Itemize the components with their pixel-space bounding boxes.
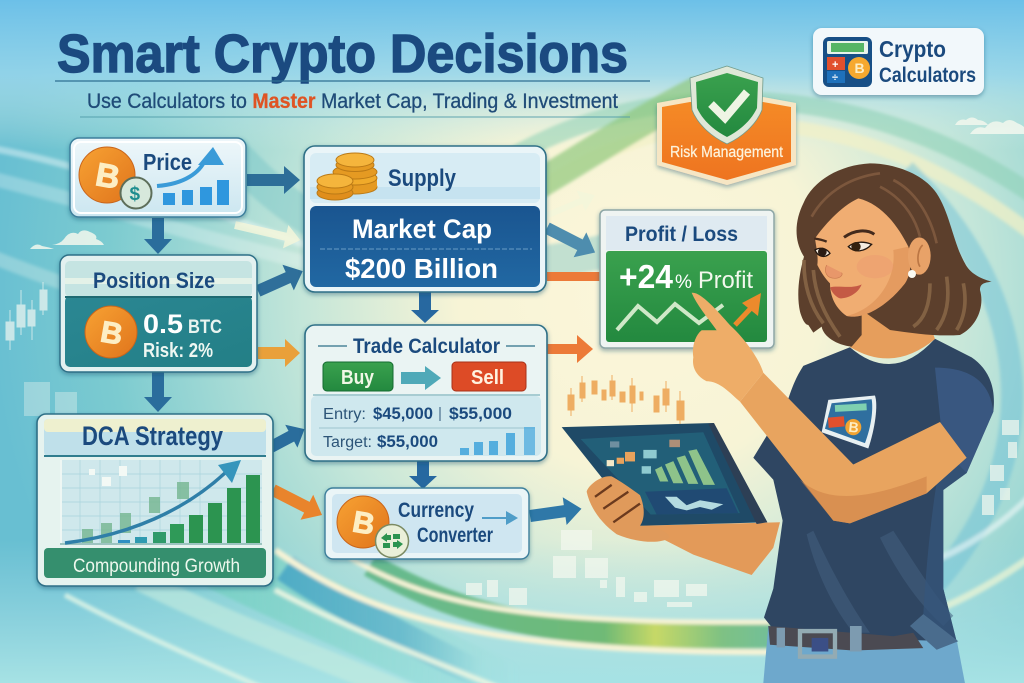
ear bbox=[908, 237, 931, 275]
panel: DCA Strategy bbox=[37, 414, 273, 586]
subtitle underline bbox=[80, 116, 630, 118]
panel: Trade Calculator: $45,000 bbox=[373, 405, 433, 423]
cheek and jaw shading bbox=[847, 247, 911, 317]
title underline bbox=[55, 80, 650, 82]
mouth bbox=[830, 284, 862, 298]
shirt hem overlap bbox=[910, 614, 958, 650]
panel: Trade Calculator: Entry: bbox=[323, 406, 366, 423]
panel: DCA Strategy: DCA Strategy bbox=[82, 421, 223, 451]
pointing hand bbox=[692, 293, 763, 402]
finger lines bbox=[595, 485, 640, 522]
arrow: price to supply bbox=[247, 166, 300, 194]
holding hand bbox=[587, 476, 670, 542]
arrow: DCA to trade bbox=[265, 418, 311, 458]
panel: Position Size: 0.5 bbox=[143, 309, 183, 339]
orange candlestick chart bbox=[568, 375, 684, 424]
icon: dollar coin: $ bbox=[130, 184, 140, 205]
icon: calculator bbox=[823, 37, 872, 87]
arm shading bbox=[800, 476, 927, 523]
pointing arm, badge, belt, tablet and hands bbox=[562, 293, 967, 657]
decorative candlesticks left bbox=[6, 282, 77, 416]
neck bbox=[850, 297, 935, 358]
button: Buy bbox=[323, 362, 393, 391]
panel: Trade Calculator: $55,000 bbox=[377, 433, 438, 451]
arrow: buy to sell bbox=[401, 366, 441, 390]
arrow: price to position size bbox=[144, 218, 172, 254]
belt bbox=[768, 626, 923, 657]
panel: Price bbox=[70, 138, 246, 217]
title: Smart Crypto Decisions bbox=[57, 24, 628, 84]
forearm and upper arm bbox=[740, 373, 967, 523]
icon: bitcoin coin bbox=[79, 147, 135, 203]
icon: calculator: ÷ bbox=[832, 72, 838, 84]
lower body and t-shirt bbox=[637, 339, 994, 683]
shirt badge bbox=[822, 395, 876, 449]
subtitle: Use Calculators to Master Market Cap, Trading & Investment bbox=[87, 90, 618, 113]
eyebrows bbox=[844, 231, 874, 237]
arrow: trade to profit bbox=[547, 335, 593, 363]
face bbox=[815, 198, 911, 317]
panel: Profit / Loss: Profit bbox=[698, 267, 753, 294]
badge: Crypto Calculators: Calculators bbox=[879, 64, 976, 87]
arrow: converter to tablet bbox=[528, 495, 583, 530]
button: Sell bbox=[452, 362, 526, 391]
icon: price rising chart bbox=[157, 147, 229, 205]
panel: Profit / Loss: +24 bbox=[619, 258, 674, 295]
growth arrow bbox=[65, 460, 241, 543]
panel: Position Size: Risk: 2% bbox=[143, 340, 213, 362]
arrow: DCA to converter bbox=[267, 478, 328, 527]
icon: bitcoin coin bbox=[85, 306, 137, 358]
arrow: trade calculator to converter bbox=[409, 460, 437, 489]
panel: Profit / Loss: % bbox=[675, 272, 692, 293]
arrow: position size to market cap bbox=[252, 258, 308, 304]
small arrow bbox=[482, 511, 518, 525]
tablet bbox=[562, 423, 767, 526]
profit zigzag line bbox=[617, 304, 723, 330]
panel: Profit / Loss bbox=[600, 210, 774, 348]
panel: Supply and Market Cap: Supply bbox=[388, 165, 457, 192]
panel: Price: Price bbox=[143, 149, 192, 175]
chart: compounding growth bbox=[60, 460, 262, 545]
button: Sell: Sell bbox=[471, 367, 504, 389]
nose bbox=[825, 265, 842, 278]
decorative pale squares bbox=[466, 420, 1019, 607]
arrow: market cap to profit bbox=[547, 272, 601, 281]
icon: calculator: B bbox=[854, 60, 865, 76]
panel: Trade Calculator: Target: bbox=[323, 434, 372, 451]
badge: Risk Management: Risk Management bbox=[670, 144, 784, 161]
eyes bbox=[848, 242, 872, 251]
arrow: market cap to trade calculator bbox=[411, 292, 439, 323]
panel: Position Size bbox=[60, 255, 257, 372]
badge: Crypto Calculators bbox=[813, 28, 984, 95]
panel: Trade Calculator: $55,000 bbox=[449, 405, 512, 423]
panel: DCA Strategy: Compounding Growth bbox=[73, 556, 240, 577]
shirt badge: B bbox=[848, 419, 860, 436]
panel: Supply and Market Cap bbox=[304, 146, 546, 292]
mini bar chart bbox=[460, 427, 535, 455]
arrow: position size to trade calculator bbox=[258, 339, 300, 367]
panel: Supply and Market Cap: $200 Billion bbox=[345, 253, 498, 284]
icon: bitcoin coin bbox=[337, 496, 389, 548]
panel: Trade Calculator bbox=[305, 325, 547, 461]
panel: Currency Converter: Currency bbox=[398, 499, 474, 522]
person: woman pointing at profit panel with tablet bbox=[562, 163, 994, 683]
earring bbox=[908, 270, 916, 278]
icon: dollar coin bbox=[120, 178, 152, 208]
icon: exchange coin bbox=[376, 524, 408, 558]
panel: Position Size: BTC bbox=[188, 317, 222, 338]
panel: Trade Calculator: Trade Calculator bbox=[353, 335, 500, 358]
arrow: pale to profit bbox=[544, 185, 599, 225]
icon: coin stacks bbox=[317, 153, 377, 200]
hair highlights bbox=[804, 260, 965, 337]
arrow: position size to DCA bbox=[144, 372, 172, 412]
hair bbox=[797, 163, 992, 347]
arrow: supply to profit bbox=[541, 216, 601, 265]
head bbox=[797, 163, 992, 358]
icon: shield with check bbox=[690, 66, 763, 144]
panel: Supply and Market Cap: Market Cap bbox=[352, 214, 492, 244]
icon: orange up arrow bbox=[735, 293, 761, 325]
icon: bitcoin coin: B bbox=[93, 155, 123, 196]
icon: bitcoin coin: B bbox=[98, 315, 125, 352]
panel: Profit / Loss: Profit / Loss bbox=[625, 223, 738, 246]
badge: Risk Management bbox=[657, 66, 796, 185]
button: Buy: Buy bbox=[341, 367, 375, 389]
icon: bitcoin coin: B bbox=[350, 505, 377, 542]
panel: Position Size: Position Size bbox=[93, 268, 215, 293]
arrow: faint cream bbox=[232, 213, 303, 252]
panel: Currency Converter bbox=[325, 488, 529, 559]
icon: calculator: + bbox=[832, 59, 838, 71]
panel: Currency Converter: Converter bbox=[417, 524, 493, 547]
badge: Crypto Calculators: Crypto bbox=[879, 36, 946, 62]
clouds bbox=[30, 118, 1024, 249]
